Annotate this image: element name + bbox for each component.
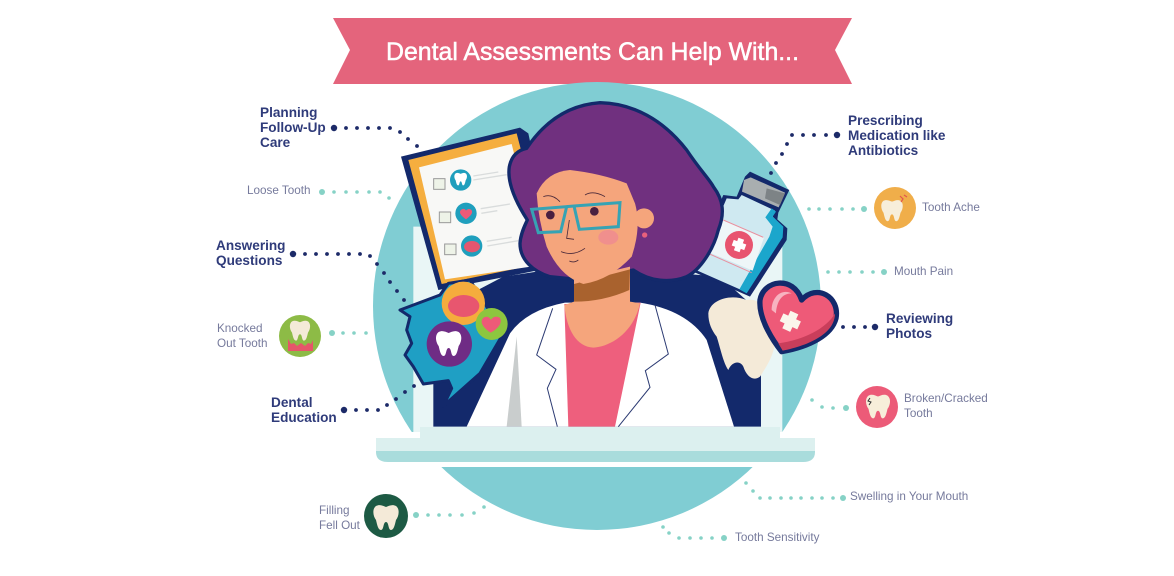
label: Loose Tooth: [247, 184, 391, 200]
label: Planning Follow-Up Care: [260, 105, 419, 150]
label: Knocked Out Tooth: [217, 315, 368, 357]
label: Planning Follow-Up Care: Planning: [260, 105, 317, 120]
label: Tooth Ache: [807, 187, 980, 229]
label: Prescribing Medication like Antibiotics: Prescribing: [848, 113, 923, 128]
large tooth: [708, 297, 775, 379]
label: Broken/Cracked Tooth: [810, 386, 988, 428]
label: Tooth Sensitivity: Tooth Sensitivity: [735, 531, 820, 544]
label: Swelling in Your Mouth: Swelling in Your Mouth: [850, 490, 968, 503]
navy backdrop: [433, 267, 761, 427]
label: Prescribing Medication like Antibiotics: Antibiotics: [848, 143, 918, 158]
label: Tooth Ache: Tooth Ache: [922, 201, 980, 214]
icon: knocked out tooth: [279, 315, 321, 357]
medicine bottle: [691, 172, 789, 297]
label: Tooth Sensitivity: [661, 525, 820, 544]
eyes, nose and mouth: [543, 193, 605, 262]
label: Broken/Cracked Tooth: Broken/Cracked: [904, 392, 988, 405]
label: Prescribing Medication like Antibiotics: Medication like: [848, 128, 946, 143]
label: Swelling in Your Mouth: [744, 481, 968, 503]
title: Dental Assessments Can Help With...: [386, 38, 799, 66]
laptop screen: [413, 227, 782, 432]
label: Prescribing Medication like Antibiotics: [769, 113, 946, 175]
heart with cross: [760, 283, 836, 352]
label: Knocked Out Tooth: Knocked: [217, 322, 262, 335]
central illustration: dentist on laptop: [400, 103, 836, 432]
heart bubble: [476, 308, 508, 340]
label: Filling Fell Out: Filling: [319, 504, 350, 517]
neck and chest: [564, 267, 640, 348]
label: Dental Education: Dental: [271, 395, 313, 410]
brain bubble: [442, 282, 485, 325]
label: Reviewing Photos: Reviewing: [886, 311, 953, 326]
lapels: [537, 305, 668, 427]
coat: [467, 303, 734, 427]
label: Loose Tooth: Loose Tooth: [247, 184, 310, 197]
title banner: [333, 18, 852, 84]
label: Reviewing Photos: [841, 311, 953, 341]
shirt: [564, 303, 641, 427]
label: Answering Questions: [216, 238, 406, 302]
label: Answering Questions: Answering: [216, 238, 286, 253]
head silhouette with thought bubbles: [400, 280, 508, 406]
label: Filling Fell Out: [319, 494, 486, 538]
teal background circle: [365, 82, 830, 530]
ear: [634, 208, 654, 228]
glasses: [532, 203, 620, 233]
label: Broken/Cracked Tooth: Tooth: [904, 407, 933, 420]
icon: broken tooth: [856, 386, 898, 428]
label: Dental Education: [271, 384, 416, 425]
dentist figure: [467, 103, 734, 427]
cheek: [598, 230, 618, 245]
label: Answering Questions: Questions: [216, 253, 282, 268]
icon: filling fell out: [364, 494, 408, 538]
laptop base: [376, 427, 815, 462]
tooth bubble: [427, 321, 472, 367]
clipboard: [401, 128, 557, 290]
label: Filling Fell Out: Fell Out: [319, 519, 361, 532]
label: Planning Follow-Up Care: Follow-Up: [260, 120, 326, 135]
label: Knocked Out Tooth: Out Tooth: [217, 337, 267, 350]
label: Planning Follow-Up Care: Care: [260, 135, 291, 150]
label: Mouth Pain: Mouth Pain: [894, 265, 953, 278]
icon: tooth ache: [874, 187, 916, 229]
label: Mouth Pain: [826, 265, 953, 278]
face: [537, 170, 638, 284]
label: Dental Education: Education: [271, 410, 337, 425]
hair: [509, 103, 722, 281]
label: Reviewing Photos: Photos: [886, 326, 932, 341]
